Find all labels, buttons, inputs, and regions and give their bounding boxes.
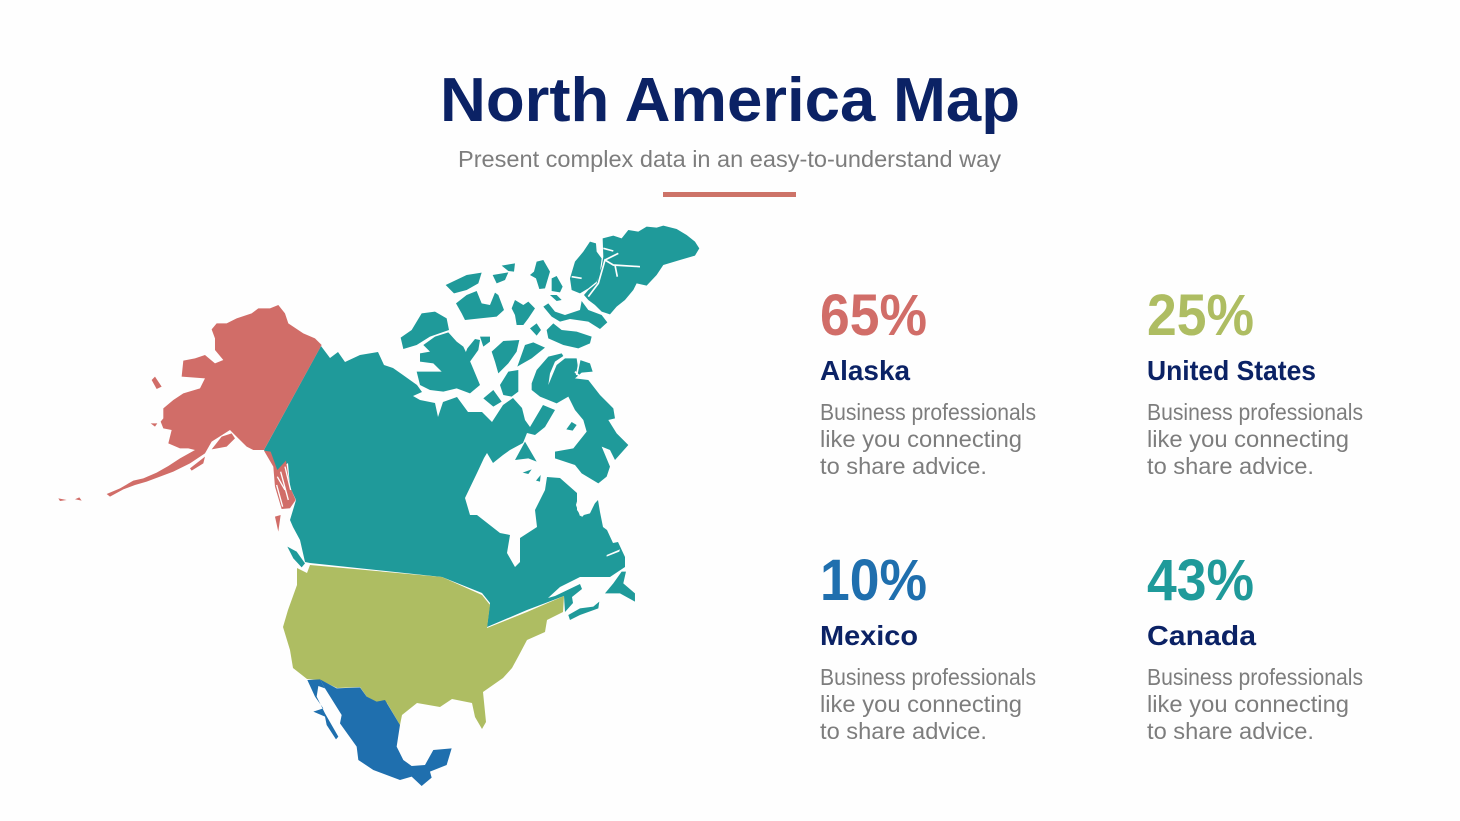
stat: Canada: 43% <box>1147 548 1254 613</box>
stat: Alaska: to share advice. <box>820 453 987 479</box>
stat: Alaska: like you connecting <box>820 426 1022 452</box>
stat: United States: to share advice. <box>1147 453 1314 479</box>
stat: United States: United States <box>1147 355 1316 386</box>
stat: United States <box>1147 283 1363 479</box>
region: Canada <box>264 226 699 627</box>
map: North America <box>58 226 699 786</box>
stat: Alaska: Business professionals <box>820 399 1036 425</box>
stat: Mexico: like you connecting <box>820 691 1022 717</box>
region: Alaska <box>58 305 322 532</box>
white water: Ellesmere fjords and channels <box>572 248 680 378</box>
stat: Mexico: Mexico <box>820 620 918 651</box>
stat: Canada: to share advice. <box>1147 718 1314 744</box>
stat: United States: like you connecting <box>1147 426 1349 452</box>
stat: Alaska: 65% <box>820 283 927 348</box>
region: Mexico <box>307 679 452 786</box>
stat: Canada <box>1147 548 1363 744</box>
stat: United States: Business professionals <box>1147 399 1363 425</box>
subtitle: Present complex data in an easy-to-understand way <box>458 146 1002 172</box>
stat: Canada: Business professionals <box>1147 664 1363 690</box>
accent bar <box>663 192 796 197</box>
white water: Hudson Bay and Ungava <box>576 496 620 557</box>
stat: Mexico: Business professionals <box>820 664 1036 690</box>
stat: United States: 25% <box>1147 283 1254 348</box>
stat: Mexico <box>820 548 1036 744</box>
stat: Mexico: to share advice. <box>820 718 987 744</box>
region: United States <box>283 565 564 729</box>
title: North America Map <box>440 66 1020 135</box>
stat: Mexico: 10% <box>820 548 927 613</box>
stat: Canada: like you connecting <box>1147 691 1349 717</box>
stat: Alaska <box>820 283 1036 479</box>
stat: Alaska: Alaska <box>820 355 910 386</box>
stat: Canada: Canada <box>1147 620 1256 651</box>
